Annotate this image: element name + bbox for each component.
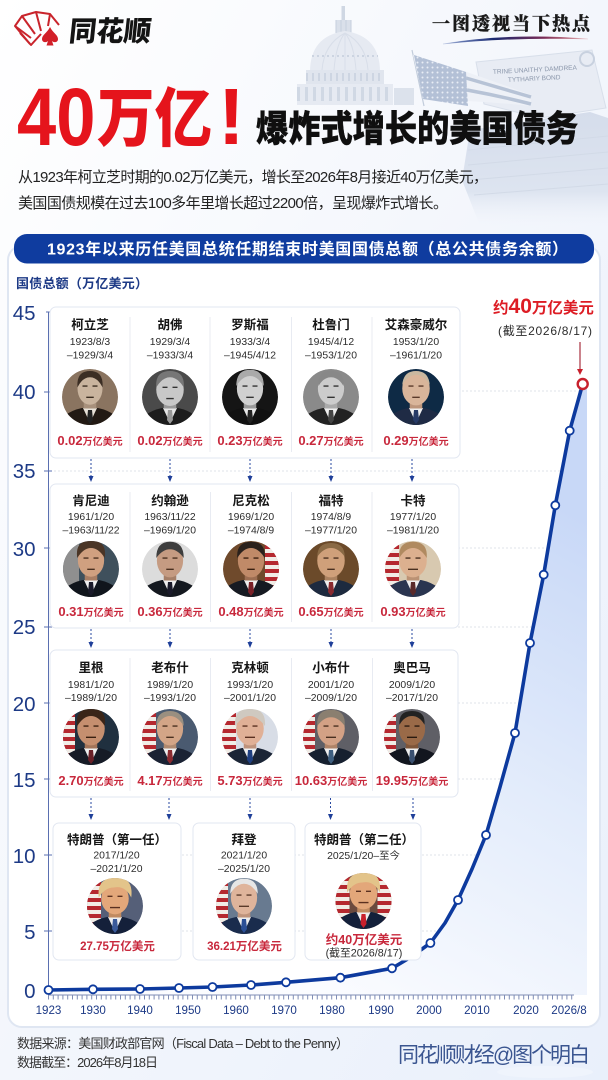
panel: presidents row 2 (50, 484, 459, 628)
president: Reagan: 2.70万亿美元 (58, 773, 124, 788)
president: George H. W. Bush: 老布什 (151, 660, 189, 675)
president: Hoover: 1929/3/4 (150, 337, 190, 348)
president: Clinton: –2001/1/20 (224, 693, 276, 704)
portrait (222, 708, 278, 765)
y axis labels (13, 302, 36, 1003)
x axis labels: 1970 (271, 1004, 297, 1017)
president: Johnson (137, 493, 203, 619)
panel: Trump first term: 特朗普（第一任） (67, 832, 167, 847)
president: Eisenhower: 0.29万亿美元 (383, 433, 449, 448)
x axis labels: 1980 (319, 1004, 345, 1017)
panel: presidents row 3 (50, 650, 458, 797)
portrait (303, 541, 359, 597)
data source note (17, 1036, 349, 1070)
president: Eisenhower (383, 317, 449, 448)
panel: presidents row 1 (50, 307, 460, 458)
president: George H. W. Bush: 1989/1/20 (147, 680, 193, 691)
y axis labels: 5 (24, 921, 36, 944)
panel: Biden: 2021/1/20 (221, 850, 267, 862)
y axis labels: 0 (24, 980, 36, 1003)
slogan: 一图透视当下热点 (432, 10, 592, 36)
gridlines (50, 391, 585, 931)
president: George W. Bush: –2009/1/20 (305, 693, 357, 704)
panel: Trump second term (305, 823, 421, 960)
x axis labels: 1960 (223, 1004, 249, 1017)
portrait (384, 709, 440, 765)
arrows row 3 to row 4 (88, 798, 416, 820)
portrait (142, 709, 198, 765)
american flag (412, 50, 531, 106)
president: Carter: 0.93万亿美元 (380, 604, 446, 619)
treasury bond document (476, 50, 606, 118)
president: Roosevelt: 1933/3/4 (230, 337, 270, 348)
president: George H. W. Bush: –1993/1/20 (144, 693, 196, 704)
portrait (142, 369, 198, 425)
president: Clinton: 克林顿 (231, 660, 269, 675)
president: Obama: 奥巴马 (393, 660, 431, 675)
president: Ford (298, 493, 364, 619)
president: Nixon: 尼克松 (232, 493, 270, 508)
x axis labels: 2020 (513, 1004, 539, 1017)
y axis labels: 15 (13, 769, 36, 792)
president: Clinton: 5.73万亿美元 (217, 773, 283, 788)
x axis ticks (48, 995, 574, 998)
slogan swoosh (443, 37, 588, 44)
title: 40万亿: 40 (17, 72, 95, 163)
president: Hoover (137, 317, 203, 448)
x axis labels: 2026/8 (551, 1004, 587, 1017)
president: Reagan (58, 661, 124, 788)
president: Ford: –1977/1/20 (305, 526, 357, 536)
president: Clinton: 1993/1/20 (227, 680, 273, 691)
portrait (303, 709, 359, 765)
president: Reagan: 1981/1/20 (68, 680, 114, 691)
x axis labels: 1923 (36, 1004, 61, 1017)
logo mark: fanned cards with spade (15, 12, 59, 46)
portrait (303, 369, 359, 425)
end point marker (578, 379, 588, 389)
panel: Biden: 36.21万亿美元 (207, 939, 282, 953)
president: Kennedy: 0.31万亿美元 (58, 604, 124, 619)
president: Coolidge: 1923/8/3 (70, 337, 110, 348)
intro paragraph: 美国国债规模在过去100多年里增长超过2200倍，呈现爆炸式增长。 (18, 195, 448, 212)
president: Coolidge: –1929/3/4 (67, 350, 113, 362)
x axis labels: 2000 (416, 1004, 442, 1017)
president: Truman: –1953/1/20 (305, 350, 357, 362)
president: Nixon: 1969/1/20 (228, 512, 274, 523)
portrait (63, 708, 119, 765)
callout arrow (577, 342, 583, 375)
data source note: 数据截至：2026年8月18日 (17, 1055, 158, 1070)
arrows row 2 to row 3 (88, 629, 414, 648)
logo wordmark: 同花顺 (67, 9, 154, 50)
president: Eisenhower: 艾森豪威尔 (385, 317, 448, 332)
president: George W. Bush: 2001/1/20 (308, 680, 354, 691)
panel: Trump first term: 27.75万亿美元 (80, 939, 155, 953)
portrait (62, 369, 118, 425)
president: George W. Bush: 10.63万亿美元 (295, 773, 367, 788)
y axis labels: 20 (13, 693, 36, 716)
president: Roosevelt: –1945/4/12 (224, 350, 276, 362)
president: Ford: 0.65万亿美元 (298, 604, 364, 619)
callout: about 40 trillion: (截至2026/8/17) (498, 324, 592, 338)
panel: Trump second term: 约40万亿美元 (326, 932, 403, 947)
president: Obama: 2009/1/20 (389, 680, 435, 691)
panel: Biden: –2025/1/20 (218, 864, 270, 875)
treasury bond document: TRINE UNAITHY DAMDREA (493, 65, 578, 76)
chart panel background (8, 246, 600, 1027)
x axis labels (36, 1004, 587, 1017)
panel header band: 1923年以来历任美国总统任期结束时美国国债总额（总公共债务余额） (47, 240, 568, 258)
title: 40万亿: ! (218, 72, 245, 161)
president: Obama: 19.95万亿美元 (376, 773, 448, 788)
curve data points (44, 427, 574, 994)
president: Carter: 1977/1/20 (390, 512, 436, 523)
president: Carter (380, 493, 446, 619)
title: 40万亿: 万亿 (97, 83, 212, 155)
president: Kennedy: 1961/1/20 (68, 512, 114, 523)
y axis labels: 30 (13, 538, 36, 561)
panel: Trump first term: 2017/1/20 (93, 850, 140, 862)
panel: Biden: 拜登 (231, 833, 257, 847)
subtitle: 爆炸式增长的美国债务 (256, 109, 578, 149)
y axis labels: 10 (13, 845, 36, 868)
callout: about 40 trillion: 约40万亿美元 (493, 295, 594, 318)
president: Roosevelt: 罗斯福 (231, 317, 269, 332)
x axis labels: 1930 (80, 1004, 106, 1017)
logo (15, 9, 154, 50)
panel header band (14, 234, 594, 264)
president: Johnson: 约翰逊 (151, 493, 189, 508)
president: George W. Bush: 小布什 (312, 660, 350, 675)
president: Kennedy: –1963/11/22 (62, 526, 120, 536)
president: Johnson: –1969/1/20 (144, 526, 196, 536)
president: Roosevelt (217, 317, 283, 448)
president: Clinton (217, 660, 283, 788)
president: George H. W. Bush (137, 660, 203, 788)
chart (13, 302, 588, 1017)
intro paragraph (18, 169, 488, 212)
watermark (398, 1044, 593, 1078)
background illustration: capitol, flag and papers (297, 6, 608, 226)
y axis labels: 45 (13, 302, 36, 325)
portrait (87, 878, 143, 934)
watermark: 同花顺财经@图个明白 (398, 1044, 590, 1067)
y axis title: 国债总额（万亿美元） (16, 276, 148, 291)
president: Carter: –1981/1/20 (387, 526, 439, 536)
president: Carter: 卡特 (400, 493, 426, 508)
y axis labels: 35 (13, 460, 36, 483)
panel: Trump first term: –2021/1/20 (90, 864, 143, 875)
stack of papers (462, 112, 608, 226)
y axis labels: 25 (13, 616, 36, 639)
x axis labels: 1950 (175, 1004, 201, 1017)
arrows row 1 to row 2 (88, 459, 414, 482)
portrait (216, 878, 272, 934)
president: Johnson: 1963/11/22 (144, 512, 196, 523)
area under curve (48, 384, 587, 995)
panel: Trump second term: 特朗普（第二任） (314, 832, 414, 847)
president: George W. Bush (295, 660, 367, 788)
president: Eisenhower: 1953/1/20 (393, 337, 439, 348)
president: Nixon: 0.48万亿美元 (218, 604, 284, 619)
president: Eisenhower: –1961/1/20 (390, 350, 442, 362)
president: Hoover: –1933/3/4 (147, 350, 193, 362)
president: Coolidge (57, 317, 123, 448)
president: Kennedy: 肯尼迪 (72, 493, 110, 508)
president: Ford: 福特 (318, 493, 344, 508)
portrait (142, 541, 198, 597)
capitol dome (297, 6, 414, 105)
intro paragraph: 从1923年柯立芝时期的0.02万亿美元，增长至2026年8月接近40万亿美元， (18, 169, 488, 186)
y axis labels: 40 (13, 381, 36, 404)
panel: Trump second term: (截至2026/8/17) (326, 946, 402, 960)
president: Reagan: 里根 (78, 661, 104, 675)
debt curve (48, 384, 583, 990)
portrait (388, 369, 444, 425)
portrait (385, 541, 441, 597)
president: Hoover: 0.02万亿美元 (137, 433, 203, 448)
portrait (222, 369, 278, 425)
president: George H. W. Bush: 4.17万亿美元 (137, 773, 203, 788)
president: Johnson: 0.36万亿美元 (137, 604, 203, 619)
president: Reagan: –1989/1/20 (65, 693, 117, 704)
treasury bond document: TYTHARIY BOND (508, 74, 561, 84)
portrait (223, 541, 279, 597)
president: Kennedy (58, 493, 124, 619)
president: Truman (298, 317, 364, 448)
title: 40万亿 (17, 72, 245, 163)
y axis line and ticks (44, 312, 52, 992)
president: Nixon (218, 493, 284, 619)
president: Truman: 杜鲁门 (312, 317, 350, 332)
panel: Biden (193, 823, 295, 960)
panel: Trump first term (53, 823, 181, 960)
president: Ford: 1974/8/9 (311, 512, 351, 523)
president: Coolidge: 0.02万亿美元 (57, 433, 123, 448)
portrait (336, 872, 392, 929)
watermark blur (497, 1066, 593, 1078)
x axis labels: 1940 (127, 1004, 153, 1017)
portrait (63, 540, 119, 597)
president: Obama: –2017/1/20 (386, 693, 438, 704)
callout: about 40 trillion (493, 295, 594, 375)
president: Truman: 0.27万亿美元 (298, 433, 364, 448)
x axis labels: 1990 (368, 1004, 394, 1017)
president: Obama (376, 660, 448, 788)
president: Roosevelt: 0.23万亿美元 (217, 433, 283, 448)
president: Coolidge: 柯立芝 (71, 317, 109, 332)
spade (42, 27, 58, 46)
president: Hoover: 胡佛 (157, 317, 183, 332)
panel: Trump second term: 2025/1/20–至今 (327, 849, 400, 862)
president: Nixon: –1974/8/9 (228, 526, 274, 536)
president: Truman: 1945/4/12 (308, 337, 354, 348)
x axis labels: 2010 (464, 1004, 490, 1017)
data source note: 数据来源：美国财政部官网（Fiscal Data – Debt to the Penny） (17, 1036, 349, 1051)
